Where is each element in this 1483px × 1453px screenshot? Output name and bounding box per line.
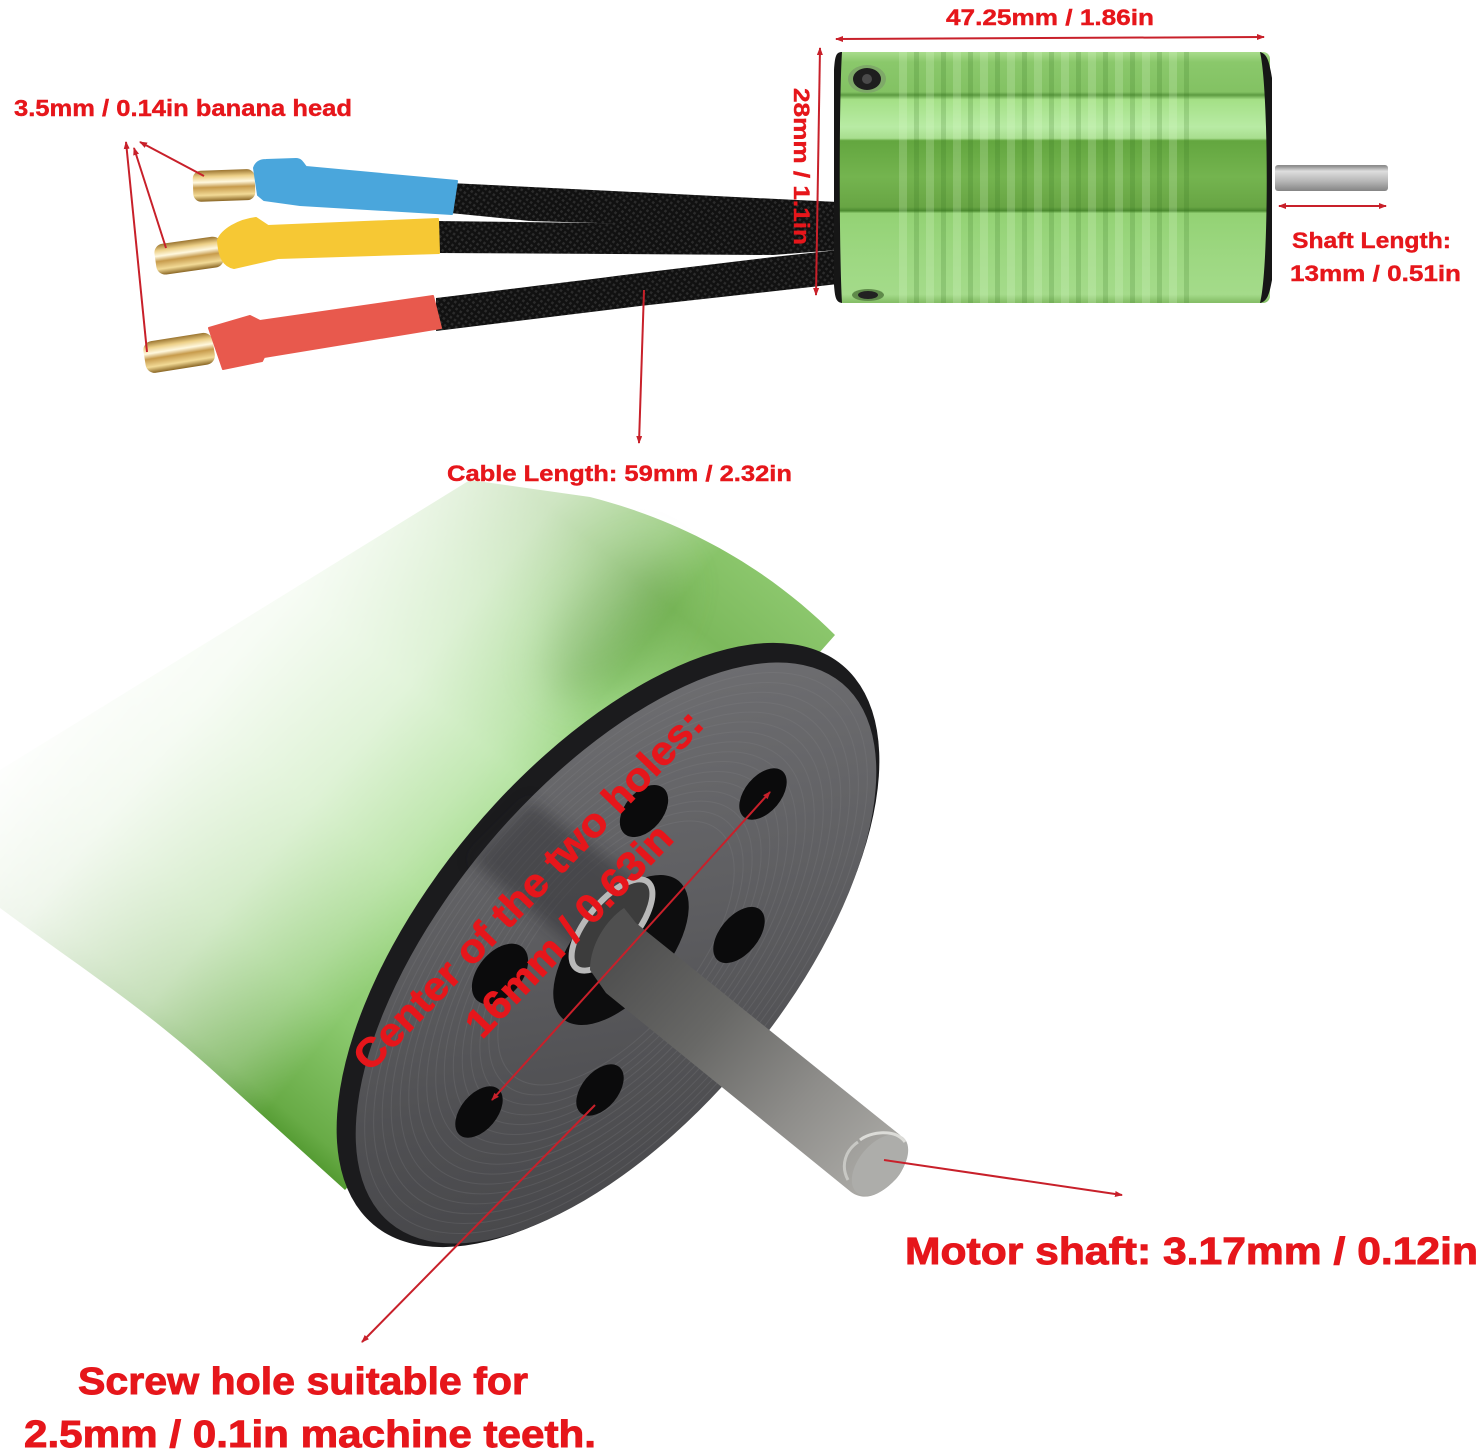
top motor [834,52,1388,303]
blue sleeve [254,159,457,214]
gold banana plug [142,332,216,374]
arrow: motor shaft [884,1160,1122,1195]
darker reflection band [540,566,672,706]
cooling ribs [899,52,1177,303]
arrow: screw hole [362,1105,595,1342]
screw: top [848,65,886,93]
big motor [0,480,908,1248]
arrow: shaft length [1279,205,1386,207]
screw: bottom [852,289,884,301]
central bore [528,851,714,1049]
wire: red connector [142,296,441,374]
label: overall length: 47.25mm / 1.86in [946,5,1154,30]
label: diameter: 28mm / 1.1in [789,88,814,245]
label: shaft length: Shaft Length: [1292,228,1451,253]
label: banana head: 3.5mm / 0.14in banana head [14,95,352,121]
concentric machining rings [273,588,959,1318]
yellow sleeve [218,218,439,268]
arrow: blue banana [140,142,204,176]
motor shaft [1275,165,1388,191]
black end caps [834,52,842,303]
dark reflection on face [470,800,650,960]
dimension arrows [126,37,1386,1342]
motor body [836,52,1270,303]
label: motor shaft: Motor shaft: 3.17mm / 0.12in [905,1231,1478,1273]
arrow: yellow banana [134,148,166,248]
label: screw hole line one: Screw hole suitable for [78,1361,528,1403]
label: hole spacing line one: Center of the two holes: [345,701,712,1079]
arrow: hole spacing [492,792,770,1100]
machined face [261,575,971,1331]
label: hole spacing line two: 16mm / 0.63in [457,816,682,1046]
wire: yellow connector [153,218,439,276]
cylinder body fading out [0,480,835,1190]
gold banana plug [192,169,256,202]
cables: braided wires [436,183,838,331]
wire: blue connector [192,159,457,214]
arrow: overall length [836,37,1264,39]
red sleeve [209,296,441,369]
arrow: diameter [816,48,820,295]
output shaft [590,908,919,1206]
black rim [237,551,979,1339]
label: shaft length value: 13mm / 0.51in [1290,261,1461,286]
arrow: red banana [126,142,147,352]
gold banana plug [153,236,225,276]
arrow: cable length [639,290,644,443]
screw holes [446,759,796,1147]
label: cable length: Cable Length: 59mm / 2.32in [447,461,792,486]
bearing ring [558,867,666,983]
